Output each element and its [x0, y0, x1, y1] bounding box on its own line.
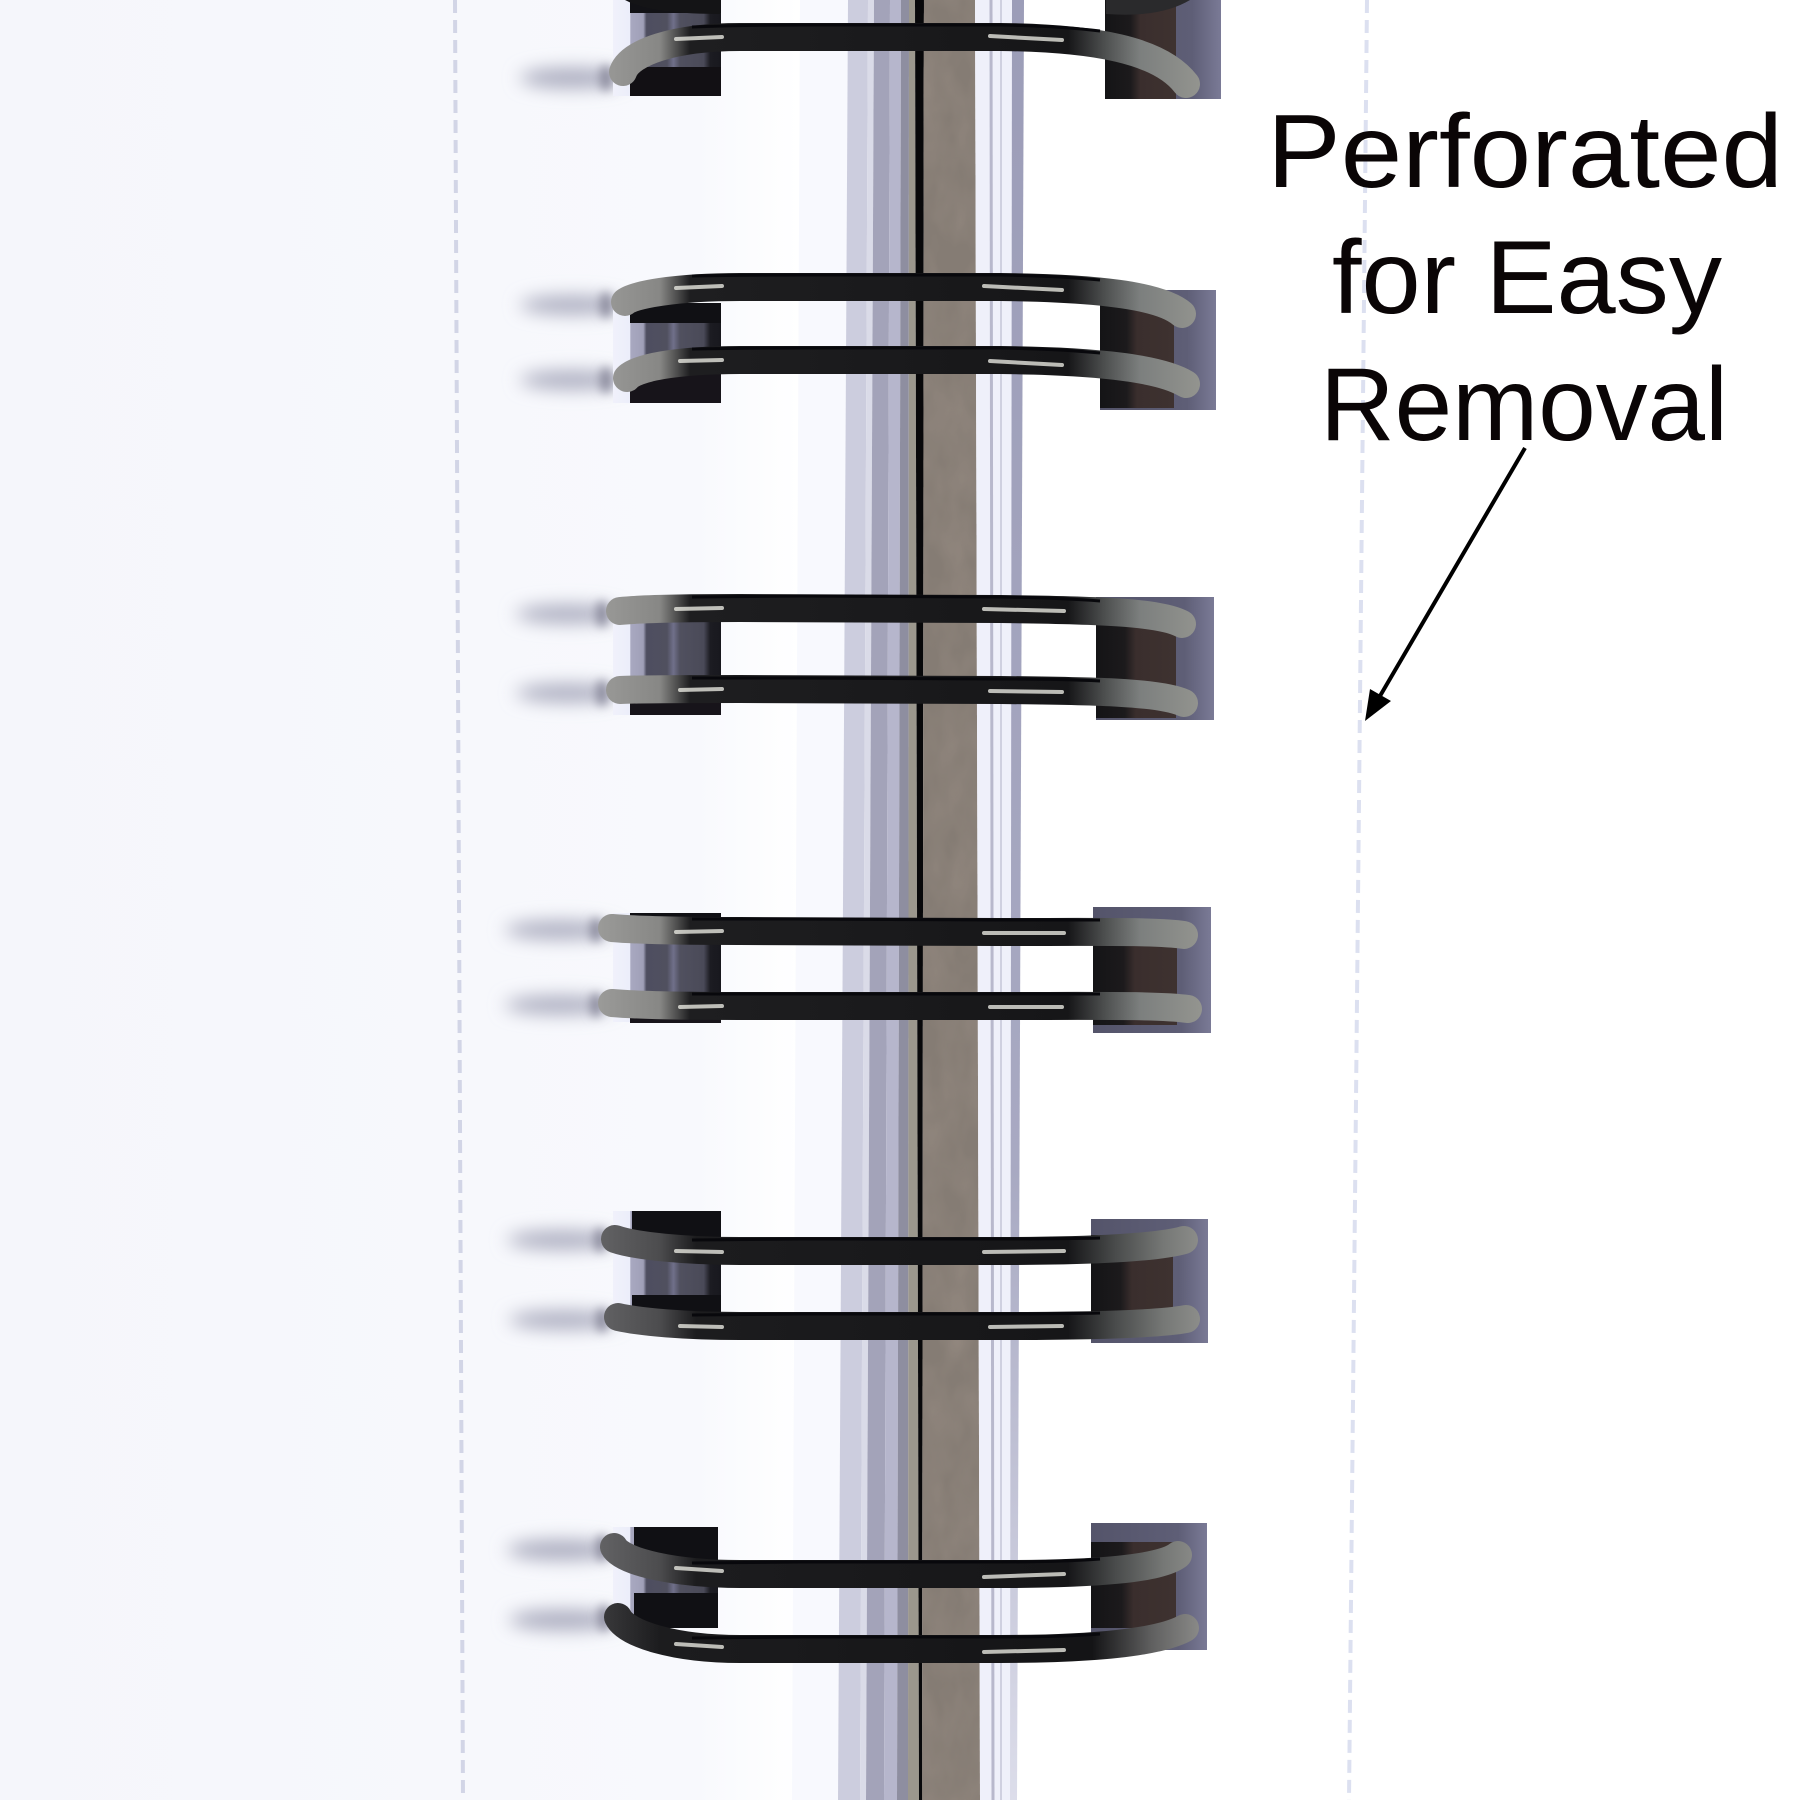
hole pair: coil 3 — [613, 597, 1214, 720]
lower wire — [620, 678, 1184, 703]
punched holes — [613, 0, 1221, 1650]
upper wire — [625, 275, 1182, 314]
wire coil 5 — [615, 1238, 1186, 1327]
lower wire — [612, 994, 1188, 1009]
page edges: lavender shadow — [866, 0, 890, 1800]
page edges: grey shadow — [897, 0, 909, 1800]
binding spine — [792, 0, 1024, 1800]
callout line 2: for Easy — [1332, 220, 1722, 336]
callout line 3: Removal — [1320, 347, 1728, 463]
page edges: grey lavender — [838, 0, 868, 1800]
lower wire — [618, 1617, 1185, 1652]
page edges: right — [975, 0, 1013, 1800]
arrow to perforation — [1365, 448, 1525, 721]
page edges: pale — [792, 0, 848, 1800]
wire coil 1 (top edge) — [623, 0, 1190, 84]
upper wire — [612, 919, 1184, 935]
shadows cast on the left page — [505, 65, 624, 1631]
wire coil 2 — [625, 275, 1186, 384]
hole pair: coil 5 — [613, 1211, 1208, 1343]
spine gap — [915, 0, 924, 1800]
hole pair: coil 2 — [613, 290, 1216, 410]
perforation line: left page — [455, 0, 463, 1800]
callout text — [1267, 94, 1783, 463]
lower wire — [618, 1313, 1186, 1327]
upper wire — [614, 1547, 1178, 1577]
perforation line: right page — [1349, 0, 1367, 1800]
upper wire — [620, 596, 1182, 624]
wire coil 4 — [612, 919, 1188, 1009]
lower wire — [627, 348, 1186, 384]
hole pair: coil 4 — [613, 907, 1211, 1033]
cardboard backing — [922, 0, 980, 1800]
callout line 1: Perforated — [1267, 94, 1783, 210]
page edge shadow: right — [1010, 0, 1024, 1800]
wire coil 6 — [614, 1547, 1185, 1652]
hole pair: coil 1 — [613, 0, 1221, 99]
wire coil 3 — [620, 596, 1184, 703]
hole pair: coil 6 — [613, 1523, 1207, 1650]
upper wire — [615, 1238, 1184, 1252]
